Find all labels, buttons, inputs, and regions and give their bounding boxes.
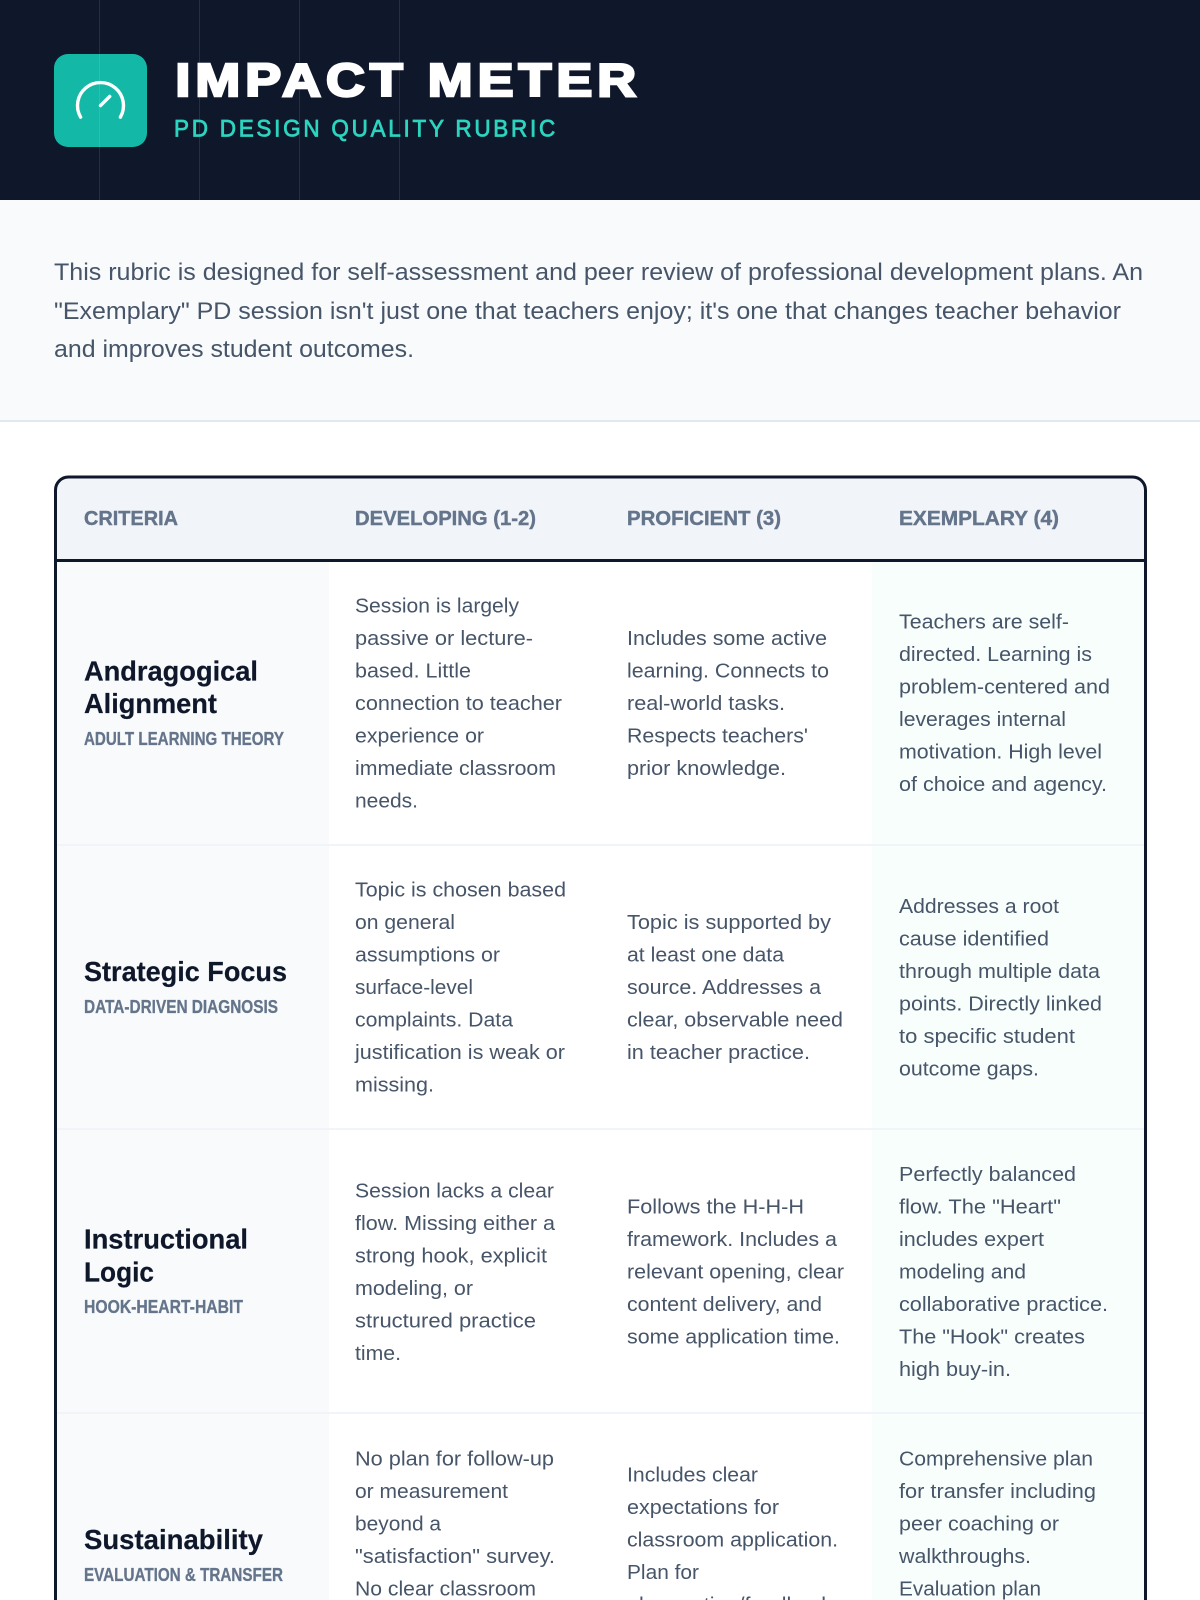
row 1 developing: [355, 595, 562, 812]
row 2 exemplary: through multiple data: [899, 961, 1101, 983]
row 1 exemplary: motivation. High level: [899, 742, 1102, 764]
row 2 developing: complaints. Data: [355, 1010, 514, 1032]
row 1 exemplary: Teachers are self-: [899, 612, 1069, 634]
row 1 proficient: [627, 628, 829, 780]
row 3 criterion: Instructional Logic: Instructional: [84, 1224, 248, 1254]
table header row: DEVELOPING (1-2): [355, 508, 536, 530]
row 3 exemplary: collaborative practice.: [899, 1294, 1108, 1316]
header banner: [0, 0, 1200, 200]
row 3 proficient: [627, 1196, 844, 1348]
table header row: CRITERIA: [84, 508, 178, 530]
row 4 proficient: Includes clear: [627, 1465, 758, 1487]
row 1 proficient: Respects teachers': [627, 725, 808, 747]
row 2 proficient: at least one data: [627, 945, 785, 967]
row 2 proficient: [627, 912, 843, 1064]
row 3 exemplary: flow. The "Heart": [899, 1196, 1061, 1218]
row 3 exemplary: modeling and: [899, 1262, 1026, 1284]
row 3 exemplary: high buy-in.: [899, 1359, 1011, 1381]
row 4 developing: "satisfaction" survey.: [355, 1546, 555, 1568]
row 1 exemplary: directed. Learning is: [899, 644, 1092, 666]
row 4 proficient: expectations for: [627, 1497, 779, 1519]
row 2 exemplary: to specific student: [899, 1026, 1075, 1048]
row 4 developing: No clear classroom: [355, 1578, 536, 1600]
row 2 criterion: Strategic Focus: [84, 956, 287, 1017]
row 2 proficient: in teacher practice.: [627, 1042, 810, 1064]
row 2 criterion: Strategic Focus: DATA-DRIVEN DIAGNOSIS: [84, 997, 278, 1017]
row 1 exemplary: leverages internal: [899, 709, 1066, 731]
row 4 developing: or measurement: [355, 1481, 508, 1503]
row 2 developing: justification is weak or: [354, 1042, 565, 1064]
row 3 proficient: framework. Includes a: [627, 1229, 838, 1251]
row 4 exemplary: [898, 1448, 1096, 1600]
row 1 criterion: Andragogical Alignment: [84, 656, 284, 749]
row 3 criterion: Instructional Logic: [84, 1224, 248, 1317]
row 3 proficient: Follows the H-H-H: [627, 1196, 804, 1218]
row 1 developing: immediate classroom: [355, 758, 556, 780]
row 4 exemplary: Comprehensive plan: [899, 1448, 1093, 1470]
row 1 exemplary: problem-centered and: [899, 677, 1110, 699]
intro text: This rubric is designed for self-assessment and peer review of professional development plans. An: [54, 259, 1143, 286]
row 2 developing: on general: [355, 912, 455, 934]
row 2 criterion: Strategic Focus: Strategic Focus: [84, 956, 287, 987]
row 2 exemplary: cause identified: [899, 928, 1049, 950]
row 1 exemplary: [899, 612, 1110, 796]
row 4 exemplary: for transfer including: [899, 1481, 1096, 1503]
row 3 exemplary: The "Hook" creates: [899, 1326, 1085, 1348]
row 3 developing: flow. Missing either a: [355, 1213, 556, 1235]
row 3 developing: strong hook, explicit: [355, 1245, 547, 1267]
row 4 exemplary: Evaluation plan: [899, 1578, 1041, 1600]
rubric table: [56, 477, 1146, 1600]
row 2 proficient: clear, observable need: [627, 1010, 843, 1032]
row 4 developing: [355, 1448, 555, 1600]
row 2 exemplary: [899, 896, 1102, 1080]
row 1 proficient: prior knowledge.: [627, 758, 786, 780]
row 1 developing: passive or lecture-: [355, 628, 533, 650]
intro panel: [0, 200, 1200, 422]
row 1 criterion: Andragogical Alignment: Andragogical: [84, 656, 258, 686]
row 4 criterion: Sustainability: EVALUATION & TRANSFER: [84, 1565, 283, 1585]
intro text: [54, 259, 1143, 363]
row 1 developing: Session is largely: [355, 595, 519, 617]
row 4 exemplary: walkthroughs.: [898, 1546, 1031, 1568]
row 3 exemplary: includes expert: [899, 1229, 1044, 1251]
row 2 proficient: source. Addresses a: [627, 977, 822, 999]
row 4 proficient: [627, 1465, 838, 1600]
row 1 developing: based. Little: [355, 660, 471, 682]
title: IMPACT METER: [175, 54, 641, 106]
table header row: EXEMPLARY (4): [899, 508, 1059, 530]
row 2 developing: Topic is chosen based: [355, 880, 566, 902]
row 2 developing: assumptions or: [355, 945, 500, 967]
row 3 developing: modeling, or: [355, 1278, 473, 1300]
row 2 developing: missing.: [355, 1075, 434, 1097]
row 2 exemplary: outcome gaps.: [899, 1058, 1039, 1080]
row 4 developing: beyond a: [355, 1513, 442, 1535]
row 3 proficient: some application time.: [627, 1326, 840, 1348]
row 3 developing: time.: [355, 1343, 401, 1365]
row 1 proficient: Includes some active: [627, 628, 827, 650]
row 3 exemplary: [899, 1164, 1108, 1381]
row 1 exemplary: of choice and agency.: [899, 774, 1107, 796]
row 1 criterion: Andragogical Alignment: Alignment: [84, 688, 217, 719]
table header row: [84, 508, 1059, 530]
row 2 exemplary: Addresses a root: [899, 896, 1059, 918]
row 3 criterion: Instructional Logic: HOOK-HEART-HABIT: [84, 1297, 243, 1317]
row 3 proficient: relevant opening, clear: [627, 1262, 844, 1284]
row 3 criterion: Instructional Logic: Logic: [84, 1256, 154, 1288]
table header row: PROFICIENT (3): [627, 508, 781, 530]
row 3 developing: [355, 1180, 556, 1365]
row 2 developing: surface-level: [355, 977, 473, 999]
row 4 criterion: Sustainability: Sustainability: [84, 1524, 264, 1555]
row 1 developing: connection to teacher: [355, 693, 562, 715]
row 4 proficient: classroom application.: [627, 1530, 838, 1552]
intro text: "Exemplary" PD session isn't just one that teachers enjoy; it's one that changes teacher behavior: [54, 298, 1121, 325]
row 2 proficient: Topic is supported by: [627, 912, 831, 934]
row 1 proficient: real-world tasks.: [627, 693, 785, 715]
row 1 criterion: Andragogical Alignment: ADULT LEARNING THEORY: [84, 729, 284, 749]
row 1 developing: needs.: [355, 790, 418, 812]
row 2 developing: [354, 880, 566, 1097]
row 1 developing: experience or: [355, 725, 484, 747]
intro text: and improves student outcomes.: [54, 336, 414, 363]
row 4 exemplary: peer coaching or: [899, 1513, 1059, 1535]
row 4 developing: No plan for follow-up: [355, 1448, 554, 1470]
row 3 exemplary: Perfectly balanced: [899, 1164, 1076, 1186]
row 3 developing: Session lacks a clear: [355, 1180, 554, 1202]
subtitle: PD DESIGN QUALITY RUBRIC: [174, 115, 558, 142]
row 4 criterion: Sustainability: [84, 1524, 283, 1585]
row 2 exemplary: points. Directly linked: [899, 993, 1102, 1015]
row 1 proficient: learning. Connects to: [627, 660, 829, 682]
icon: speedometer gauge: [54, 54, 147, 147]
row 3 developing: structured practice: [355, 1310, 536, 1332]
row 4 proficient: Plan for: [627, 1562, 699, 1584]
row 3 proficient: content delivery, and: [627, 1294, 822, 1316]
